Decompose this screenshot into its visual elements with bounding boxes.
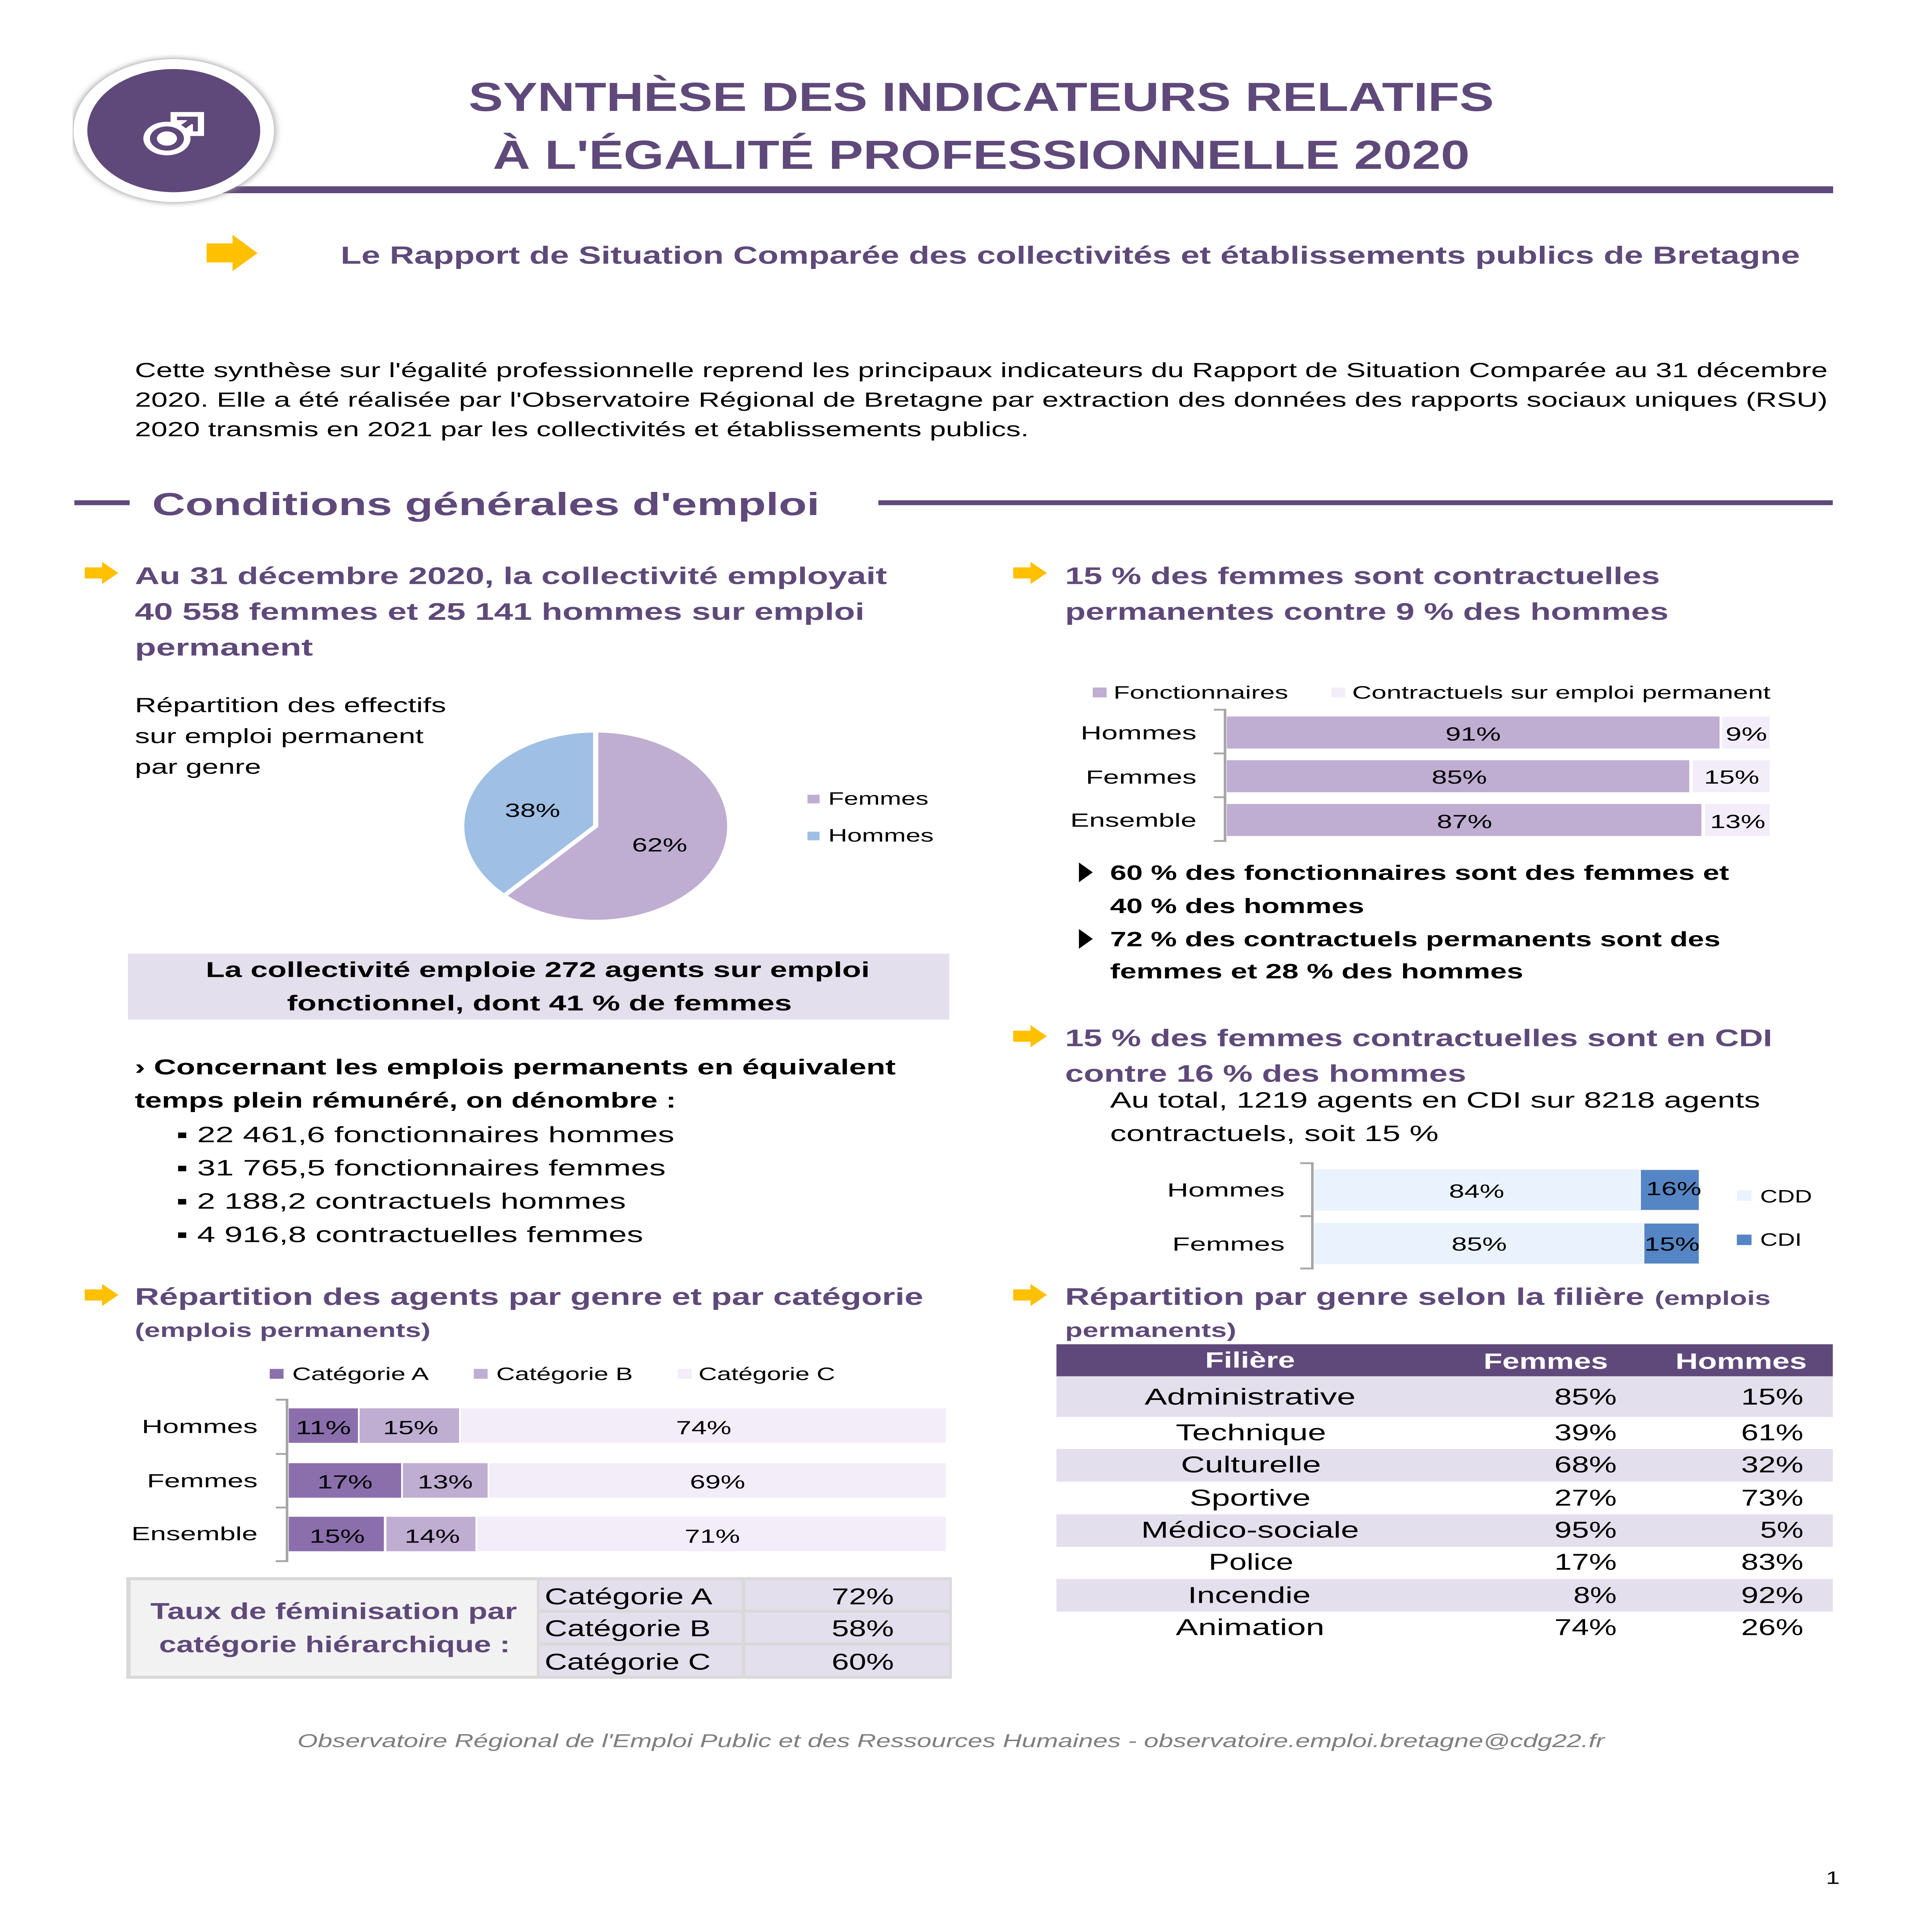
panel: CDI	[1013, 1024, 1812, 1269]
table: filières: 26%	[1741, 1615, 1803, 1640]
subtitle: Le Rapport de Situation Comparée des collectivités et établissements publics de Bretagne	[340, 242, 1800, 269]
table: filières: 39%	[1555, 1420, 1617, 1446]
title: À L'ÉGALITÉ PROFESSIONNELLE 2020	[493, 132, 1470, 178]
icon: male symbol	[147, 112, 204, 153]
text block	[1110, 1088, 1760, 1146]
chart legend: CDI	[1760, 1230, 1802, 1250]
bar chart: catégories: 13%	[418, 1471, 473, 1493]
text block: emplois en équivalent temps plein: ▪ 31 765,5 fonctionnaires femmes	[176, 1155, 666, 1180]
bar chart: statuts: 9%	[1726, 723, 1767, 745]
text block: Au total, 1219 agents en CDI sur 8218 agents	[1110, 1088, 1760, 1112]
chart legend: Contractuels sur emploi permanent	[1352, 682, 1771, 702]
title	[469, 75, 1494, 178]
header rule	[216, 186, 1833, 193]
table: filières: 85%	[1555, 1384, 1617, 1410]
table: filières: Filière	[1205, 1348, 1295, 1372]
table: taux de féminisation: Catégorie B	[545, 1616, 711, 1641]
section heading: conditions générales d'emploi: Conditions générales d'emploi	[152, 486, 820, 522]
table: filières: 32%	[1741, 1452, 1803, 1478]
pie caption: Répartition des effectifs	[135, 694, 446, 717]
heading: 15 % des femmes contractuelles sont en CDI	[1065, 1024, 1772, 1051]
intro text: 2020. Elle a été réalisée par l'Observatoire Régional de Bretagne par extraction des données des rapports sociaux uniques (RSU)	[135, 388, 1828, 411]
heading: contre 16 % des hommes	[1065, 1060, 1466, 1087]
icon: arrow	[1013, 1025, 1047, 1047]
table: filières: 68%	[1555, 1452, 1617, 1478]
table: filières: Technique	[1176, 1420, 1326, 1446]
table: filières: 27%	[1555, 1485, 1617, 1511]
bar chart: catégories: 17%	[317, 1471, 373, 1493]
table: taux de féminisation: 72%	[832, 1584, 894, 1609]
bar chart: catégories: Hommes	[142, 1415, 258, 1437]
intro text: 2020 transmis en 2021 par les collectivités et établissements publics.	[135, 418, 1029, 440]
table: filières: Culturelle	[1181, 1452, 1321, 1478]
heading: permanentes contre 9 % des hommes	[1065, 598, 1669, 625]
panel: contractuelles permanentes	[1013, 562, 1771, 983]
icon: arrow	[1013, 1284, 1047, 1306]
bar chart: catégories: 15%	[310, 1525, 365, 1547]
heading: (emplois	[1655, 1287, 1771, 1309]
pie chart: 62%	[632, 834, 687, 855]
table: filières: Police	[1209, 1549, 1293, 1575]
bar chart: statuts: 87%	[1437, 811, 1492, 832]
table: filières: 8%	[1573, 1583, 1617, 1608]
bar chart: catégories: Ensemble	[131, 1523, 258, 1544]
heading: permanent	[135, 634, 313, 661]
bar chart: CDD / CDI: 15%	[1644, 1233, 1700, 1255]
heading: Au 31 décembre 2020, la collectivité employait	[135, 563, 887, 589]
text block: emplois en équivalent temps plein: ▪ 4 916,8 contractuelles femmes	[176, 1222, 643, 1247]
icon: arrow	[85, 1284, 119, 1306]
text block: emplois en équivalent temps plein: › Concernant les emplois permanents en équivalent	[135, 1055, 896, 1079]
pie legend: Hommes	[828, 825, 934, 845]
panel: effectifs	[85, 562, 934, 922]
bar chart: catégories: 14%	[405, 1525, 460, 1547]
bar chart: CDD / CDI	[1167, 1163, 1701, 1269]
table: filières: Incendie	[1188, 1583, 1311, 1608]
chart legend	[1093, 682, 1771, 702]
bar chart: statuts: 85%	[1432, 766, 1487, 788]
callout: emplois fonctionnels: La collectivité emploie 272 agents sur emploi	[206, 958, 870, 982]
text block: emplois en équivalent temps plein: ▪ 2 188,2 contractuels hommes	[176, 1189, 626, 1214]
pie caption	[135, 694, 446, 778]
heading	[1065, 1283, 1771, 1341]
heading	[1065, 1024, 1772, 1087]
heading	[135, 563, 887, 661]
intro text	[135, 359, 1828, 440]
bar chart: catégories: 74%	[676, 1417, 731, 1438]
table: filières: Animation	[1176, 1615, 1325, 1640]
key points	[1079, 861, 1729, 983]
text block: contractuels, soit 15 %	[1110, 1121, 1439, 1146]
heading: (emplois permanents)	[135, 1320, 430, 1341]
text block: emplois en équivalent temps plein	[135, 1055, 896, 1247]
chart legend: Fonctionnaires	[1114, 682, 1288, 702]
pie legend	[808, 788, 934, 845]
bar chart: catégories: 15%	[383, 1417, 438, 1438]
text block: emplois en équivalent temps plein: temps plein rémunéré, on dénombre :	[135, 1088, 676, 1112]
chart legend	[270, 1364, 835, 1384]
bar chart: CDD / CDI: 85%	[1451, 1233, 1507, 1255]
table: filières: 95%	[1555, 1517, 1617, 1543]
heading: Répartition par genre selon la filière	[1065, 1283, 1644, 1310]
bar chart: catégories: 71%	[685, 1525, 740, 1547]
chart legend: Catégorie C	[699, 1364, 835, 1384]
table: taux de féminisation	[126, 1577, 952, 1679]
chart legend: Catégorie B	[496, 1364, 633, 1384]
panel: répartition par filière	[1013, 1283, 1833, 1640]
chart legend: Catégorie A	[292, 1364, 429, 1384]
heading	[135, 1283, 923, 1341]
icon: subtitle arrow	[207, 235, 258, 271]
table: taux de féminisation: Catégorie C	[545, 1649, 711, 1675]
table: filières	[1056, 1344, 1833, 1640]
pie legend: Femmes	[828, 788, 929, 808]
intro text: Cette synthèse sur l'égalité professionnelle reprend les principaux indicateurs du Rapport de Situation Comparée au 31 décembre	[135, 359, 1828, 381]
table: filières: 5%	[1760, 1517, 1803, 1543]
heading: 15 % des femmes sont contractuelles	[1065, 563, 1660, 589]
logo badge	[0, 49, 275, 209]
pie chart: 38%	[505, 799, 560, 821]
bar chart: CDD / CDI: 16%	[1646, 1178, 1701, 1199]
table: taux de féminisation: 58%	[832, 1616, 894, 1641]
key points: 40 % des hommes	[1110, 894, 1364, 917]
table: filières: Médico-sociale	[1141, 1517, 1359, 1543]
table: filières: Hommes	[1675, 1349, 1807, 1374]
table: filières: Administrative	[1145, 1384, 1356, 1410]
section heading: conditions générales d'emploi	[74, 486, 1833, 522]
heading	[1065, 563, 1669, 625]
bar chart: statuts: 15%	[1704, 766, 1759, 788]
table: filières: Femmes	[1483, 1349, 1608, 1374]
callout: emplois fonctionnels	[128, 954, 949, 1020]
bar chart: catégories	[131, 1400, 946, 1561]
bar chart: statuts	[1070, 710, 1770, 841]
bar chart: statuts: Ensemble	[1070, 810, 1196, 831]
pie chart	[462, 731, 730, 922]
table: taux de féminisation: 60%	[832, 1649, 894, 1675]
heading: 40 558 femmes et 25 141 hommes sur emploi	[135, 598, 864, 625]
footer: Observatoire Régional de l'Emploi Public et des Ressources Humaines - observatoire.emploi.bretagne@cdg22.fr	[298, 1731, 1606, 1751]
text block: emplois en équivalent temps plein: ▪ 22 461,6 fonctionnaires hommes	[176, 1122, 674, 1147]
heading: Répartition des agents par genre et par catégorie	[135, 1283, 923, 1310]
callout: emplois fonctionnels: fonctionnel, dont 41 % de femmes	[287, 991, 792, 1015]
chart legend	[1737, 1186, 1812, 1250]
bar chart: statuts: Hommes	[1081, 722, 1196, 743]
key points: femmes et 28 % des hommes	[1110, 959, 1523, 983]
panel: répartition par catégorie	[85, 1283, 952, 1679]
table: filières: 73%	[1741, 1485, 1803, 1511]
table: filières: 83%	[1741, 1549, 1803, 1575]
bar chart: statuts: 91%	[1446, 723, 1501, 745]
title: SYNTHÈSE DES INDICATEURS RELATIFS	[469, 75, 1494, 120]
table: filières: 15%	[1741, 1384, 1803, 1410]
chart legend: CDD	[1760, 1186, 1812, 1206]
table: taux de féminisation: Taux de féminisation par	[150, 1599, 517, 1624]
bar chart: CDD / CDI: 84%	[1449, 1180, 1504, 1202]
pie caption: par genre	[135, 755, 261, 778]
table: filières: Sportive	[1190, 1485, 1311, 1511]
key points: 60 % des fonctionnaires sont des femmes et	[1110, 861, 1729, 884]
bar chart: statuts: Femmes	[1086, 766, 1196, 788]
table: filières: 17%	[1555, 1549, 1617, 1575]
heading: permanents)	[1065, 1320, 1236, 1341]
bar chart: catégories: Femmes	[147, 1470, 258, 1492]
bar chart: statuts: 13%	[1710, 811, 1766, 832]
table: filières: 74%	[1555, 1615, 1617, 1640]
pie caption: sur emploi permanent	[135, 724, 424, 747]
table: taux de féminisation: catégorie hiérarchique :	[159, 1632, 510, 1657]
icon: arrow	[85, 562, 119, 584]
table: taux de féminisation: Catégorie A	[545, 1584, 713, 1609]
key points: 72 % des contractuels permanents sont des	[1110, 927, 1720, 951]
icon: arrow	[1013, 562, 1047, 584]
table: filières: 92%	[1741, 1583, 1803, 1608]
bar chart: CDD / CDI: Femmes	[1172, 1233, 1285, 1255]
page number: 1	[1826, 1868, 1840, 1888]
table: filières: 61%	[1741, 1420, 1803, 1446]
bar chart: CDD / CDI: Hommes	[1167, 1179, 1285, 1201]
bar chart: catégories: 11%	[296, 1417, 351, 1438]
bar chart: catégories: 69%	[690, 1471, 745, 1493]
